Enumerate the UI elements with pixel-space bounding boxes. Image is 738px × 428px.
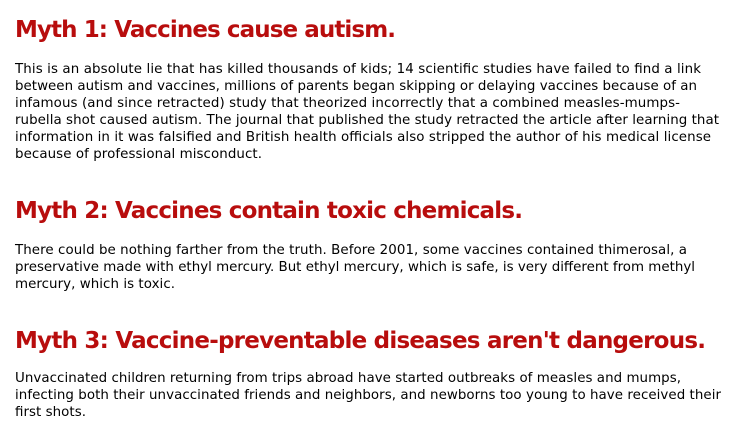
text block: myth 3 explanation: first shots. (15, 405, 86, 420)
text block: myth 1 explanation: because of professional misconduct. (15, 147, 262, 162)
heading: myth 2: Myth 2: Vaccines contain toxic chemicals. (15, 198, 523, 224)
text block: myth 1 explanation: infamous (and since retracted) study that theorized incorrectly that a combined measles-mumps- (15, 96, 680, 111)
heading: myth 1: Myth 1: Vaccines cause autism. (15, 17, 396, 43)
text block: myth 1 explanation: information in it was falsified and British health officials also stripped the author of his medical license (15, 130, 711, 145)
text block: myth 2 explanation: There could be nothing farther from the truth. Before 2001, some vaccines contained thimerosal, a (14, 243, 687, 258)
text block: myth 3 explanation: Unvaccinated children returning from trips abroad have started outbreaks of measles and mumps, (15, 371, 681, 386)
panel: myth 1 (14, 17, 719, 162)
text block: myth 1 explanation (14, 62, 719, 162)
heading: myth 3: Myth 3: Vaccine-preventable diseases aren't dangerous. (15, 328, 706, 354)
text block: myth 3 explanation: infecting both their unvaccinated friends and neighbors, and newborns too young to have received their (15, 388, 721, 403)
text block: myth 1 explanation: rubella shot caused autism. The journal that published the study retracted the article after learning that (15, 113, 719, 128)
text block: myth 2 explanation: mercury, which is toxic. (15, 277, 175, 292)
panel: myth 3 (15, 328, 721, 420)
panel: myth 2 (14, 198, 695, 292)
text block: myth 1 explanation: between autism and vaccines, millions of parents began skipping or delaying vaccines because of an (15, 79, 697, 94)
text block: myth 2 explanation: preservative made with ethyl mercury. But ethyl mercury, which is safe, is very different from methyl (15, 260, 695, 275)
text block: myth 1 explanation: This is an absolute lie that has killed thousands of kids; 14 scientific studies have failed to find a link (14, 62, 701, 77)
text block: myth 2 explanation (14, 243, 695, 292)
text block: myth 3 explanation (15, 371, 721, 420)
